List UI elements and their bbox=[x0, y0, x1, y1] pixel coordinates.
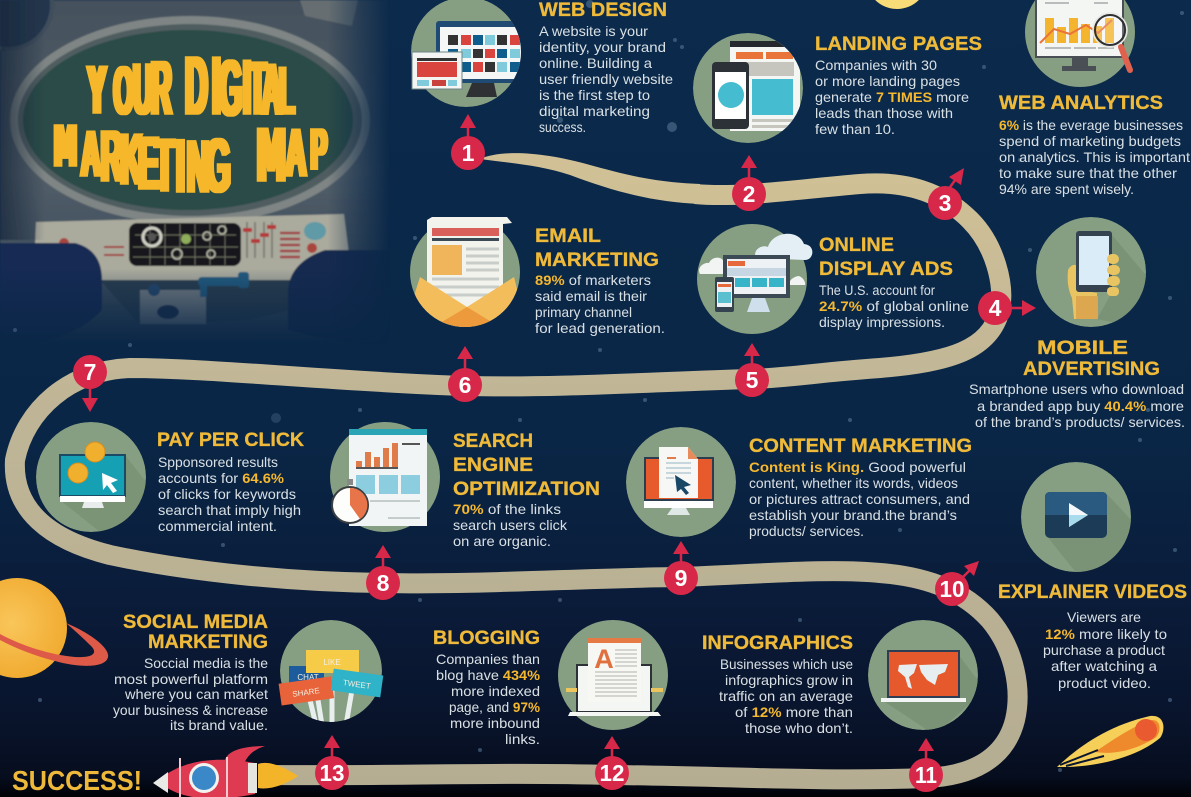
text block: more indexed bbox=[451, 683, 540, 699]
pin 1: 1 bbox=[462, 140, 475, 166]
title: Your Digital Marketing Map: O bbox=[114, 52, 134, 129]
pin 5: 5 bbox=[746, 367, 759, 393]
heading: OPTIMIZATION bbox=[453, 479, 600, 500]
text block: infographics grow in bbox=[725, 672, 853, 688]
pin 3 bbox=[928, 168, 964, 220]
heading: ENGINE bbox=[453, 455, 533, 476]
rocket bbox=[153, 746, 298, 797]
title: Your Digital Marketing Map: P bbox=[311, 118, 327, 182]
text block: on are organic. bbox=[453, 533, 551, 549]
porthole bbox=[0, 0, 52, 49]
pin 5 bbox=[735, 343, 769, 397]
heading: INFOGRAPHICS bbox=[702, 633, 853, 654]
pin 11 bbox=[909, 738, 943, 792]
text block bbox=[113, 655, 268, 733]
title: Your Digital Marketing Map bbox=[54, 40, 327, 209]
heading: WEB DESIGN bbox=[539, 0, 667, 21]
title: Your Digital Marketing Map: A bbox=[286, 116, 306, 192]
window frame bbox=[10, 16, 370, 224]
icon: report with stopwatch bbox=[330, 422, 440, 532]
text block: most powerful platform bbox=[114, 671, 268, 687]
heading: EMAIL bbox=[535, 226, 601, 247]
number pins and arrows bbox=[73, 114, 1036, 792]
text block bbox=[749, 459, 970, 539]
heading: CONTENT MARKETING bbox=[749, 436, 972, 457]
text block: those who don’t. bbox=[745, 720, 853, 736]
step 11: infographics bbox=[702, 620, 985, 736]
text block bbox=[436, 651, 541, 747]
text block: Viewers are bbox=[1067, 609, 1141, 625]
text block: The U.S. account for bbox=[819, 282, 935, 298]
text block: primary channel bbox=[535, 304, 632, 320]
pin 4: 4 bbox=[989, 295, 1002, 321]
icon: laptop with article: A bbox=[594, 644, 614, 674]
text block bbox=[158, 454, 301, 534]
text block: success. bbox=[539, 119, 586, 135]
pin 6 bbox=[448, 346, 482, 402]
text block bbox=[999, 117, 1190, 197]
step 13: social media marketing bbox=[113, 612, 383, 733]
title: Your Digital Marketing Map: A bbox=[262, 49, 282, 130]
text block: is the first step to bbox=[539, 87, 650, 103]
cockpit illustration bbox=[0, 0, 400, 345]
text block: or pictures attract consumers, and bbox=[749, 491, 970, 507]
step 12: blogging bbox=[433, 620, 668, 747]
text block: for lead generation. bbox=[535, 320, 665, 336]
text block: blog have 434% bbox=[436, 667, 541, 683]
text block: where you can market bbox=[124, 686, 268, 702]
text block: of clicks for keywords bbox=[158, 486, 296, 502]
window glass bbox=[23, 30, 353, 210]
text block: links. bbox=[505, 731, 540, 747]
step 6: email marketing bbox=[400, 217, 665, 340]
text block bbox=[815, 57, 969, 137]
heading: DISPLAY ADS bbox=[819, 259, 953, 280]
icon: hand holding phone bbox=[1036, 217, 1150, 327]
text block bbox=[969, 381, 1185, 430]
icon: social signs: CHAT bbox=[297, 673, 319, 682]
text block: Soccial media is the bbox=[144, 655, 268, 671]
pin 6: 6 bbox=[459, 372, 471, 398]
pin 2: 2 bbox=[743, 181, 755, 207]
text block: few than 10. bbox=[815, 121, 895, 137]
title: Your Digital Marketing Map: M bbox=[54, 115, 77, 180]
text block: 24.7% of global online bbox=[819, 298, 969, 314]
planet: ringed saturn bbox=[0, 578, 108, 678]
text block: to make sure that the other bbox=[999, 165, 1177, 181]
heading: WEB ANALYTICS bbox=[999, 93, 1163, 114]
road: winding path bbox=[15, 153, 1018, 779]
step 9: content marketing bbox=[626, 427, 972, 539]
pin 10 bbox=[935, 561, 979, 606]
title: Your Digital Marketing Map: T bbox=[155, 125, 174, 208]
step 10: explainer videos bbox=[998, 462, 1187, 691]
heading: SOCIAL MEDIA bbox=[123, 612, 268, 633]
text block: your business & increase bbox=[113, 702, 268, 718]
icon: video play button bbox=[1021, 462, 1131, 572]
icon: envelope with letter bbox=[410, 217, 520, 327]
text block: spend of marketing budgets bbox=[999, 133, 1181, 149]
text block: generate 7 TIMES more bbox=[815, 89, 969, 105]
control console bbox=[35, 214, 350, 282]
title: Your Digital Marketing Map: I bbox=[243, 44, 251, 131]
text block: search that imply high bbox=[158, 502, 301, 518]
pin 8: 8 bbox=[377, 570, 390, 596]
right seat bbox=[288, 249, 378, 324]
text block: of the brand’s products/ services. bbox=[975, 414, 1185, 430]
text block: purchase a product bbox=[1043, 642, 1165, 658]
text block: said email is their bbox=[535, 288, 647, 304]
pin 2 bbox=[732, 155, 766, 211]
heading: PAY PER CLICK bbox=[157, 430, 304, 451]
title: Your Digital Marketing Map: N bbox=[187, 127, 209, 209]
title: Your Digital Marketing Map: Y bbox=[88, 55, 106, 129]
text block: commercial intent. bbox=[158, 518, 277, 534]
pin 4 bbox=[978, 291, 1036, 325]
text block: 12% more likely to bbox=[1045, 626, 1167, 642]
icon: landing page and phone bbox=[693, 33, 803, 143]
text block bbox=[539, 23, 673, 135]
heading: LANDING PAGES bbox=[815, 34, 982, 55]
step 2: landing pages bbox=[693, 33, 982, 143]
text block: user friendly website bbox=[539, 71, 673, 87]
comet bbox=[1057, 716, 1163, 767]
text block: Content is King. Good powerful bbox=[749, 459, 966, 475]
pin 1 bbox=[451, 114, 485, 170]
step 8: search engine optimization bbox=[330, 422, 600, 549]
icon: social signs: LIKE bbox=[323, 658, 341, 667]
text block: after watching a bbox=[1051, 658, 1157, 674]
text block: digital marketing bbox=[539, 103, 650, 119]
step 7: pay per click bbox=[36, 422, 304, 540]
wall sign bbox=[300, 0, 358, 26]
text block bbox=[719, 656, 853, 736]
text block: products/ services. bbox=[749, 523, 864, 539]
text block: accounts for 64.6% bbox=[158, 470, 285, 486]
text block: more inbound bbox=[450, 715, 540, 731]
text block: establish your brand.the brand’s bbox=[749, 507, 957, 523]
heading: SEARCH bbox=[453, 431, 533, 452]
pin 12: 12 bbox=[600, 760, 624, 786]
pin 11: 11 bbox=[915, 762, 937, 788]
text block: 70% of the links bbox=[453, 501, 561, 517]
title: Your Digital Marketing Map: K bbox=[120, 119, 142, 200]
title: Your Digital Marketing Map: L bbox=[279, 52, 295, 129]
pin 10: 10 bbox=[940, 576, 964, 602]
text block: Businesses which use bbox=[720, 656, 853, 672]
pin 3: 3 bbox=[939, 190, 951, 216]
title: Your Digital Marketing Map: I bbox=[176, 124, 185, 209]
step 1: web design bbox=[411, 0, 673, 135]
pin 7: 7 bbox=[84, 359, 96, 385]
pin 13 bbox=[315, 735, 349, 790]
heading: BLOGGING bbox=[433, 628, 540, 649]
title: Your Digital Marketing Map: R bbox=[151, 47, 172, 131]
title: Your Digital Marketing Map: G bbox=[206, 124, 231, 209]
pin 9 bbox=[664, 541, 698, 595]
text block: 89% of marketers bbox=[535, 272, 651, 288]
text block: or more landing pages bbox=[815, 73, 960, 89]
heading: MARKETING bbox=[535, 250, 659, 271]
text block: traffic on an average bbox=[719, 688, 853, 704]
text block: Companies with 30 bbox=[815, 57, 937, 73]
heading: EXPLAINER VIDEOS bbox=[998, 582, 1187, 603]
text block: its brand value. bbox=[170, 717, 268, 733]
left seat bbox=[0, 242, 103, 324]
icon: monitor with document bbox=[626, 427, 736, 537]
icon: laptop with article bbox=[558, 620, 668, 730]
text block bbox=[453, 501, 568, 549]
pin 8 bbox=[366, 545, 400, 600]
icon: social signs bbox=[280, 620, 382, 725]
text block: 94% are spent wisely. bbox=[999, 181, 1134, 197]
icon: monitor with coins and cursor bbox=[36, 422, 146, 532]
pin 7 bbox=[73, 355, 107, 412]
heading: ADVERTISING bbox=[1023, 359, 1160, 380]
sign: share: SHARE bbox=[292, 686, 320, 699]
text block: leads than those with bbox=[815, 105, 953, 121]
heading: ONLINE bbox=[819, 235, 894, 256]
text block: Smartphone users who download bbox=[969, 381, 1184, 397]
title: Your Digital Marketing Map: R bbox=[101, 116, 123, 197]
text block: page, and 97% bbox=[449, 699, 541, 715]
icon: analytics monitor with magnifier bbox=[1025, 0, 1135, 87]
text block: on analytics. This is important bbox=[999, 149, 1190, 165]
heading: MARKETING bbox=[148, 632, 268, 653]
title: Your Digital Marketing Map: E bbox=[138, 123, 159, 206]
icon: laptop with world map bbox=[868, 620, 978, 730]
step 4: mobile advertising bbox=[969, 217, 1185, 430]
text block: display impressions. bbox=[819, 314, 945, 330]
sign: tweet bbox=[331, 669, 383, 697]
title: Your Digital Marketing Map: M bbox=[256, 116, 286, 199]
pin 9: 9 bbox=[675, 565, 687, 591]
icon: website monitor bbox=[411, 0, 521, 107]
sign: share bbox=[279, 676, 334, 706]
text block: A website is your bbox=[539, 23, 648, 39]
success label: SUCCESS! bbox=[12, 765, 142, 796]
step 5: online display ads bbox=[697, 224, 969, 334]
text block bbox=[819, 282, 969, 330]
title: Your Digital Marketing Map: D bbox=[185, 40, 208, 133]
lower console and joystick bbox=[100, 271, 290, 324]
title: Your Digital Marketing Map: I bbox=[212, 40, 221, 133]
text block: Companies than bbox=[436, 651, 540, 667]
text block: a branded app buy 40.4% more bbox=[977, 398, 1184, 414]
text block: Spponsored results bbox=[158, 454, 278, 470]
text block bbox=[535, 272, 665, 336]
pin 12 bbox=[595, 736, 629, 790]
heading: MOBILE bbox=[1037, 338, 1128, 359]
title: Your Digital Marketing Map: A bbox=[81, 117, 101, 190]
icon: display screens and clouds bbox=[697, 224, 812, 334]
planet: moon at top bbox=[866, 0, 928, 9]
title: Your Digital Marketing Map: G bbox=[219, 44, 242, 132]
text block: search users click bbox=[453, 517, 568, 533]
text block: product video. bbox=[1058, 675, 1151, 691]
text block: of 12% more than bbox=[735, 704, 853, 720]
title: Your Digital Marketing Map: U bbox=[133, 49, 153, 130]
text block: 6% is the everage businesses bbox=[999, 117, 1183, 133]
text block: identity, your brand bbox=[539, 39, 666, 55]
sign: tweet: TWEET bbox=[342, 678, 371, 691]
title: Your Digital Marketing Map: T bbox=[249, 48, 266, 131]
pin 13: 13 bbox=[320, 760, 344, 786]
text block: content, whether its words, videos bbox=[749, 475, 958, 491]
text block: online. Building a bbox=[539, 55, 652, 71]
step 3: web analytics bbox=[999, 0, 1190, 197]
text block bbox=[1043, 609, 1167, 691]
